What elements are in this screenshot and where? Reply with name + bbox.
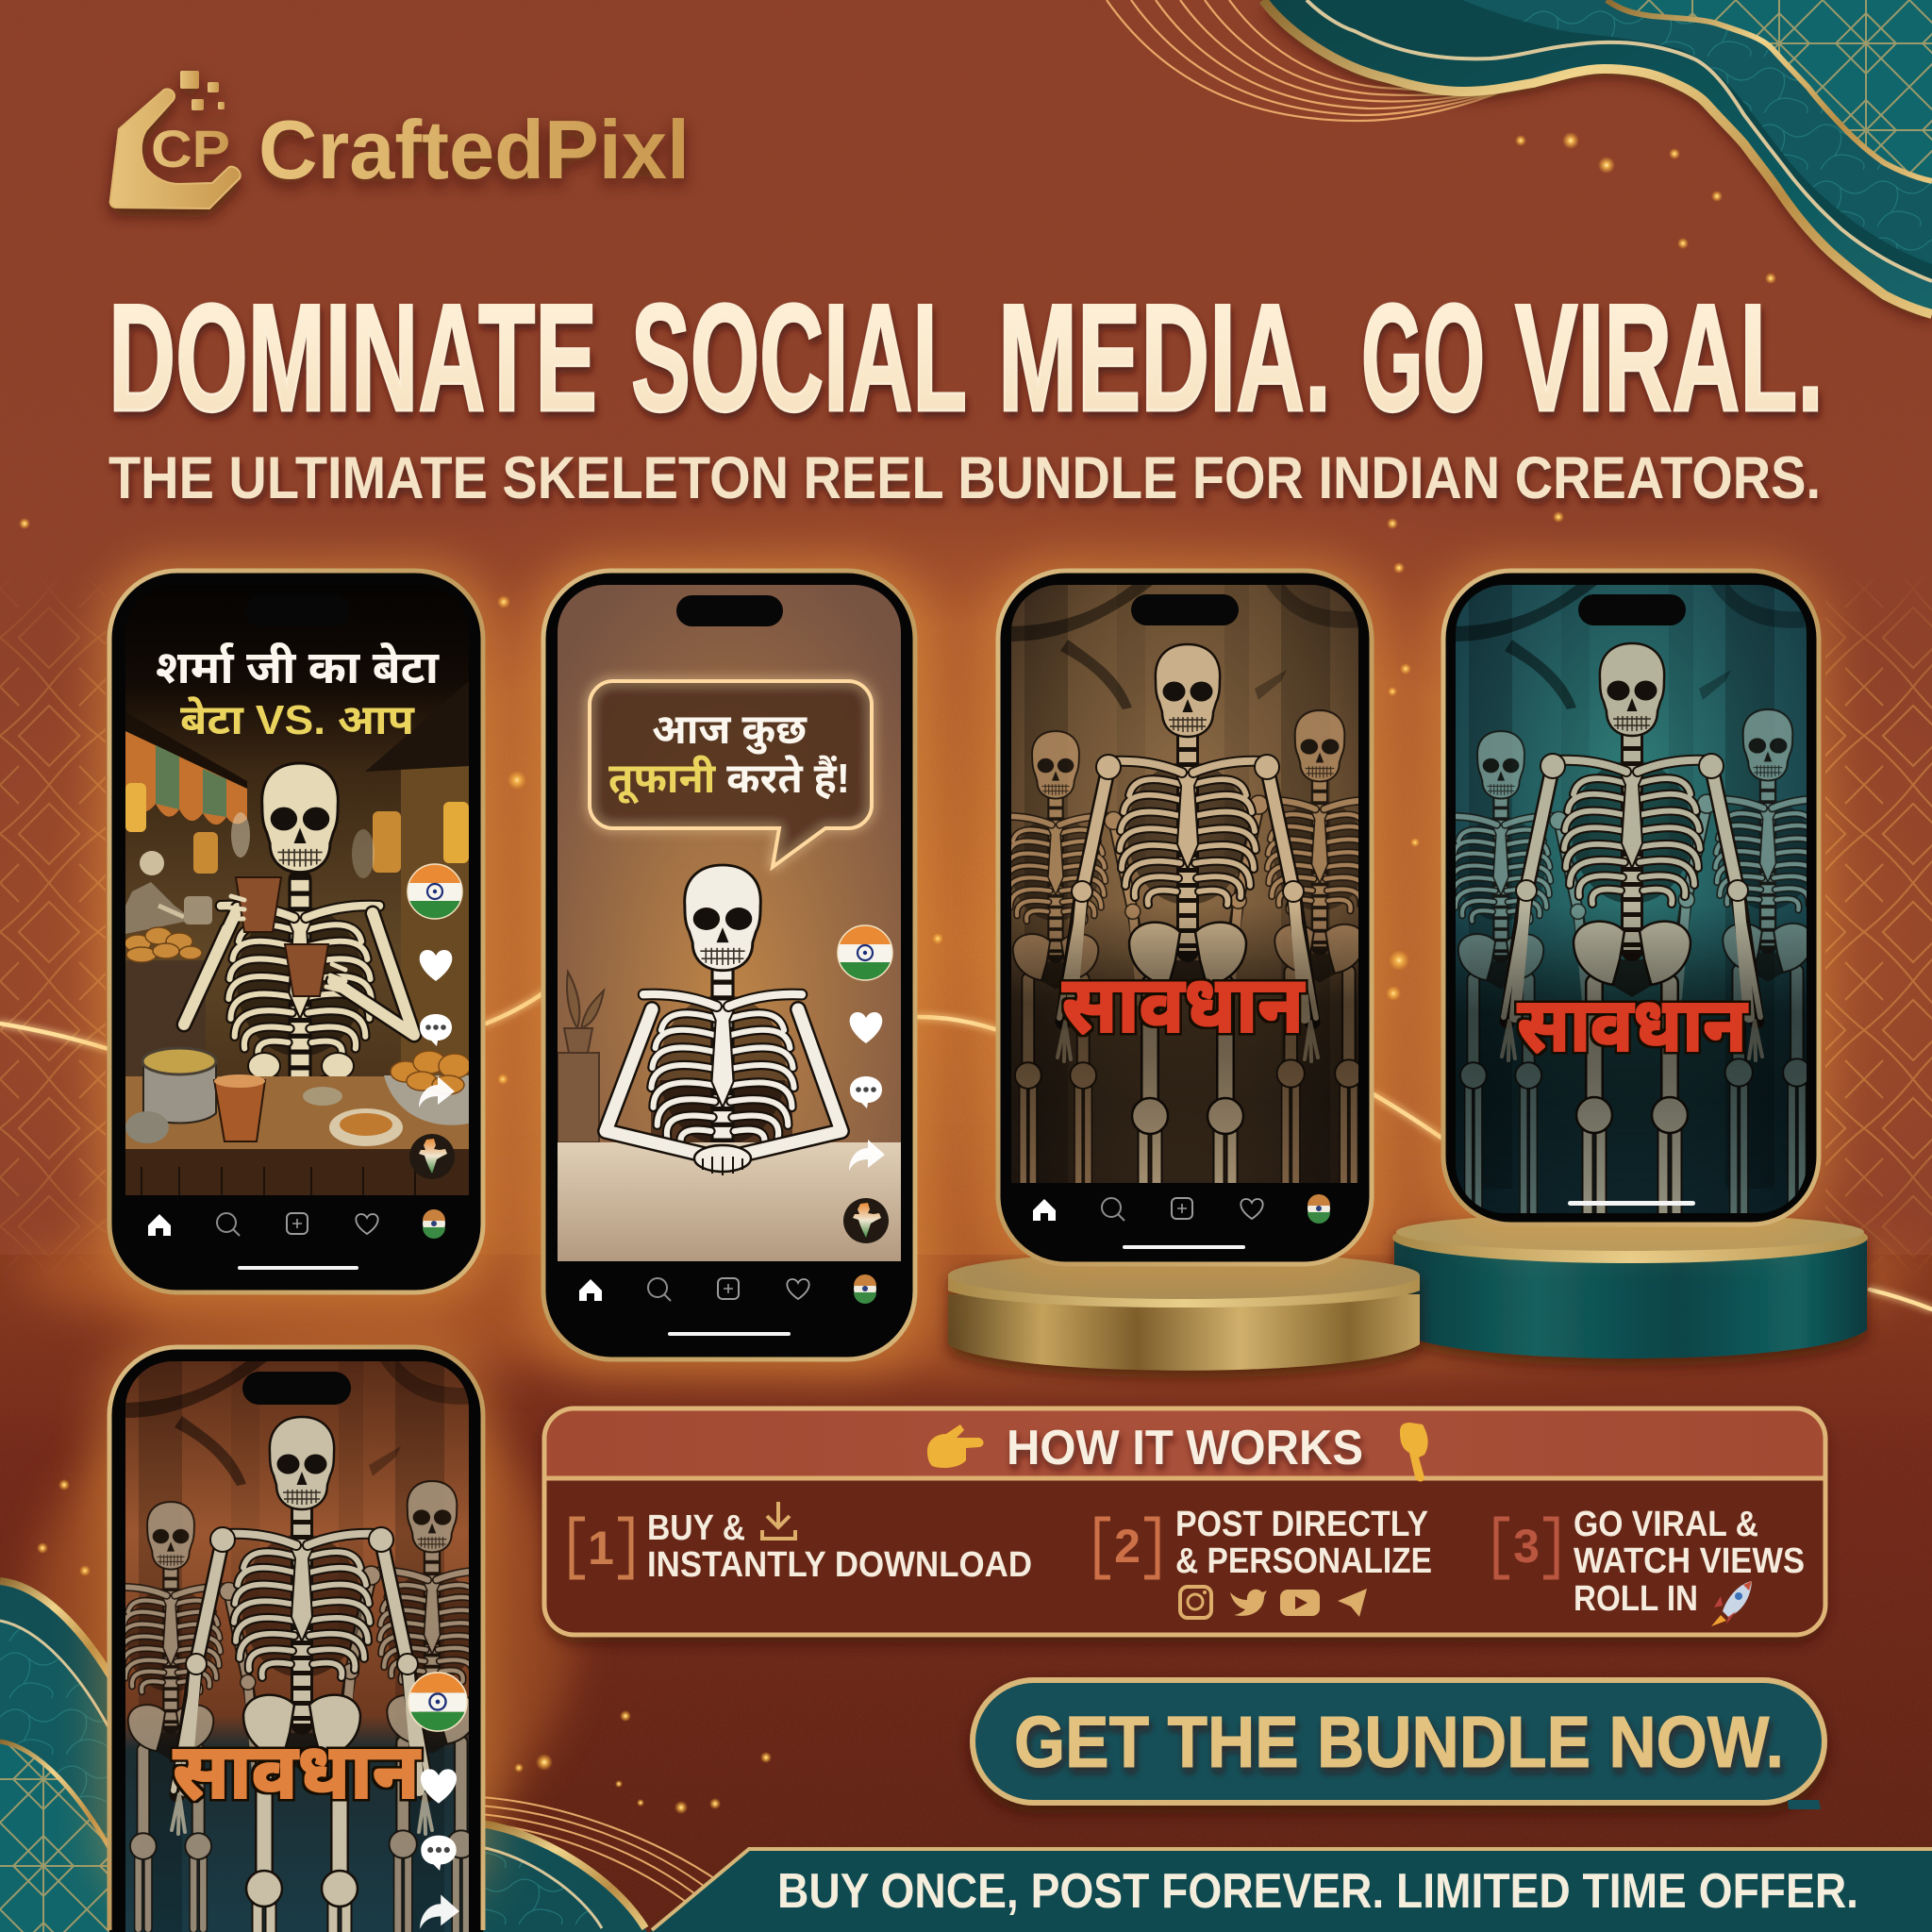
panel: how it works	[544, 1408, 1825, 1635]
food pile	[125, 927, 202, 962]
table	[125, 1076, 469, 1152]
dynamic island	[1131, 594, 1239, 625]
corner ornament: bottom centre teal and gold waves	[481, 1797, 726, 1932]
icon: hand with pixels	[110, 71, 241, 208]
caption: Hindi overlay: बेटा VS. आप	[180, 695, 415, 743]
phone 3: sepia forest skeleton	[960, 557, 1420, 1305]
reel action icons	[408, 1673, 467, 1929]
step 3	[1496, 1505, 1805, 1626]
tab bar	[148, 1209, 445, 1239]
light streaks behind the phones	[0, 992, 1932, 1309]
decorative lattice: left wall	[0, 575, 106, 1274]
sparkles	[19, 132, 1776, 1814]
bottom offer band	[650, 1849, 1932, 1932]
step 1	[572, 1502, 1032, 1585]
neon speech bubble: आज कुछ	[652, 707, 808, 755]
arms and skull	[606, 865, 841, 1175]
icon: rocket	[1711, 1581, 1752, 1626]
step 2: POST DIRECTLY	[1175, 1505, 1428, 1544]
home indicator	[668, 1332, 791, 1336]
caption: Hindi overlay	[156, 641, 440, 743]
tab bar	[579, 1274, 876, 1304]
corner ornament: top right teal and gold waves	[1107, 0, 1932, 314]
title: GO	[1361, 273, 1485, 443]
step 3: 3	[1513, 1520, 1540, 1573]
screen scene	[1406, 585, 1868, 1304]
title: MEDIA.	[998, 273, 1331, 443]
podium: teal	[1392, 1212, 1868, 1358]
step 2	[1097, 1505, 1432, 1618]
podium: gold	[948, 1252, 1420, 1371]
call to action button: GET THE BUNDLE NOW.	[1014, 1702, 1784, 1783]
dynamic island	[1578, 594, 1686, 625]
bowl and plates	[125, 1111, 169, 1143]
icon: download	[762, 1502, 795, 1539]
main skeleton	[643, 969, 802, 1243]
logo: CraftedPixl	[110, 71, 690, 208]
caption: Hindi overlay: शर्मा जी का बेटा	[156, 641, 440, 693]
background skeletons	[75, 1481, 532, 1931]
dynamic island	[245, 595, 350, 626]
reel action icons	[838, 925, 892, 1243]
warning word: सावधान	[174, 1729, 421, 1815]
title	[108, 273, 1824, 443]
icon: hand with pixels: CP	[151, 119, 230, 178]
background skeletons	[1406, 709, 1868, 1218]
step 2: 2	[1114, 1520, 1141, 1573]
warning word: सावधान	[1517, 983, 1748, 1067]
step 1: BUY &	[647, 1508, 745, 1548]
step 2: & PERSONALIZE	[1175, 1541, 1432, 1581]
home indicator	[238, 1266, 358, 1270]
home indicator	[1568, 1201, 1695, 1206]
icons: social networks	[1180, 1587, 1367, 1618]
background skeletons	[960, 710, 1420, 1219]
screen scene	[558, 585, 901, 1261]
phone 1: street food skeleton	[94, 557, 498, 1307]
icon: hand pointing down	[1400, 1423, 1428, 1481]
phone 2: neon speech bubble skeleton	[528, 557, 932, 1374]
warning word: सावधान	[1062, 960, 1305, 1049]
home indicator	[1123, 1245, 1245, 1249]
neon speech bubble	[590, 681, 872, 867]
step 3: WATCH VIEWS	[1574, 1541, 1805, 1581]
title: SOCIAL	[631, 273, 967, 443]
reel action icons	[408, 864, 462, 1179]
step 1: 1	[588, 1522, 614, 1574]
call to action button	[973, 1680, 1824, 1809]
table	[558, 1142, 901, 1261]
main skeleton	[1502, 643, 1762, 1304]
screen scene	[125, 646, 469, 1195]
pot	[143, 1064, 216, 1123]
decorative lattice: right wall	[1825, 575, 1932, 1274]
title: DOMINATE	[108, 273, 597, 443]
heading: HOW IT WORKS	[1007, 1421, 1363, 1475]
step 1: INSTANTLY DOWNLOAD	[647, 1545, 1032, 1585]
step 3: GO VIRAL &	[1574, 1505, 1758, 1544]
main skeleton	[172, 1417, 432, 1932]
dynamic island	[676, 595, 783, 626]
corner ornament: bottom left teal and gold waves	[0, 1581, 118, 1932]
phone 4: teal forest skeleton	[1406, 557, 1868, 1304]
icon: hand pointing right	[927, 1424, 983, 1468]
screen scene	[75, 1361, 532, 1932]
neon speech bubble: तूफानी करते हैं!	[608, 754, 850, 805]
tea glass	[214, 1080, 265, 1141]
cups held	[236, 877, 281, 932]
phone 5: orange forest skeleton	[75, 1332, 532, 1932]
wordmark: CraftedPixl	[258, 103, 690, 196]
dynamic island	[242, 1372, 351, 1405]
screen scene	[960, 585, 1420, 1305]
step 3: ROLL IN	[1574, 1579, 1698, 1619]
tab bar	[1033, 1194, 1330, 1224]
main skeleton	[175, 762, 423, 1076]
main skeleton	[1058, 644, 1318, 1305]
